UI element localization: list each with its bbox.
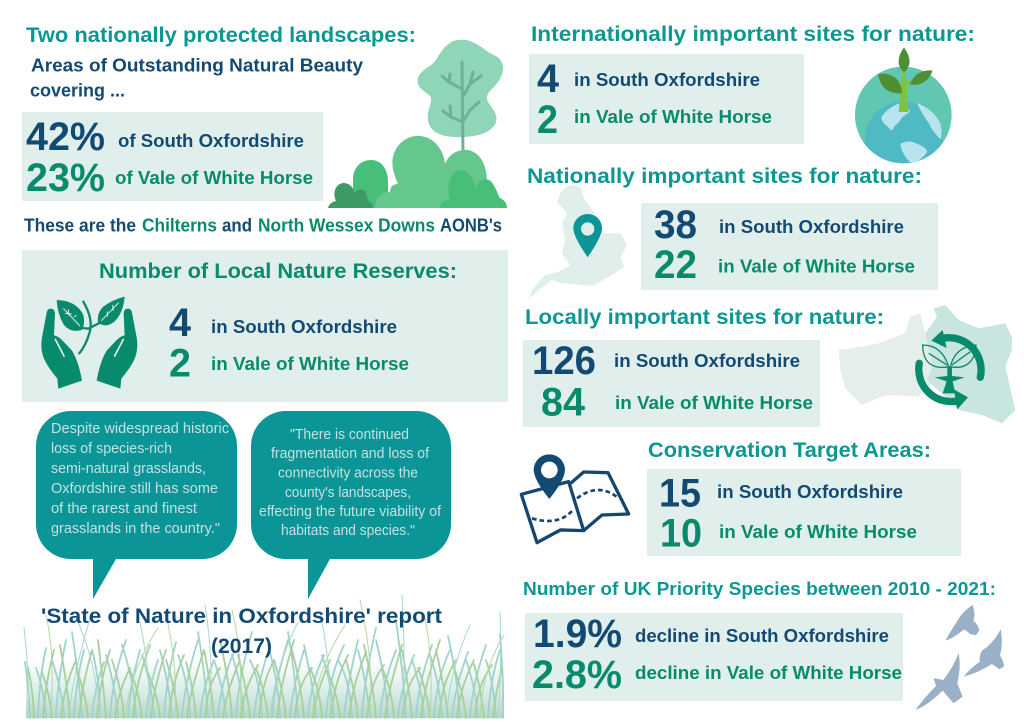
panel: AONB coverage — [22, 112, 323, 201]
icon: three birds — [915, 605, 1004, 710]
panel: priority species — [525, 612, 903, 701]
text: Chilterns and North Wessex Downs: and — [222, 214, 252, 236]
text: report source: 'State of Nature in Oxfordshire' report — [41, 604, 442, 628]
callout: grasslands quote: loss of species-rich — [51, 441, 172, 457]
stat: 10 Vale of White Horse: 10 — [660, 512, 702, 556]
heading: locally important sites: Locally important sites for nature: — [525, 306, 884, 329]
stat: 2.8 percent Vale of White Horse: 2.8% — [532, 653, 622, 697]
icon: district map with recycling leaf — [839, 305, 1015, 423]
heading: number of local nature reserves: Number of Local Nature Reserves: — [99, 260, 457, 283]
stat: 1.9 percent South Oxfordshire — [533, 612, 889, 656]
heading: number of UK priority species: Number of UK Priority Species between 2010 - 2021: — [523, 578, 996, 599]
stat: 4 reserves South Oxfordshire: in South Oxfordshire — [211, 316, 397, 337]
heading: nationally important sites: Nationally important sites for nature: — [527, 165, 922, 188]
icon: hands holding leaves — [41, 297, 137, 389]
stat: 15 South Oxfordshire — [659, 472, 903, 516]
stat: 2 Vale of White Horse: in Vale of White Horse — [574, 106, 772, 127]
stat: 42 percent South Oxfordshire — [26, 115, 304, 159]
stat: 84 Vale of White Horse: 84 — [541, 380, 586, 424]
text: areas of outstanding natural beauty: Areas of Outstanding Natural Beauty — [31, 54, 364, 76]
stat: 23 percent Vale of White Horse: of Vale of White Horse — [115, 167, 313, 188]
panel: national sites — [641, 203, 938, 290]
stat: 38 South Oxfordshire: 38 — [654, 203, 697, 247]
stat: 126 South Oxfordshire — [532, 339, 800, 383]
text: areas of outstanding natural beauty — [30, 54, 364, 100]
stat: 23 percent Vale of White Horse — [26, 156, 313, 200]
text: report source — [41, 604, 442, 658]
callout: grasslands quote — [36, 411, 237, 599]
stat: 4 South Oxfordshire: in South Oxfordshire — [574, 69, 760, 90]
callout: fragmentation quote — [251, 411, 451, 599]
illustration: tree and bushes — [328, 40, 507, 208]
stat: 4 South Oxfordshire — [537, 57, 760, 101]
text: areas of outstanding natural beauty: covering ... — [30, 80, 125, 100]
callout: fragmentation quote: county's landscapes, — [285, 485, 411, 501]
callout: grasslands quote: of the rarest and finest — [51, 501, 197, 517]
stat: 22 Vale of White Horse: in Vale of White Horse — [718, 256, 915, 276]
illustration: meadow grass — [24, 595, 504, 718]
stat: 2.8 percent Vale of White Horse: decline in Vale of White Horse — [635, 662, 902, 683]
callout: grasslands quote: Despite widespread historic — [51, 421, 229, 437]
text: report source: (2017) — [211, 634, 272, 658]
text: Chilterns and North Wessex Downs: AONB's — [440, 214, 502, 236]
stat: 10 Vale of White Horse — [660, 512, 917, 556]
heading: conservation target areas: Conservation Target Areas: — [648, 439, 931, 462]
stat: 126 South Oxfordshire: in South Oxfordshire — [614, 350, 800, 371]
text: Chilterns and North Wessex Downs: These are the — [24, 214, 136, 236]
stat: 1.9 percent South Oxfordshire: 1.9% — [533, 612, 622, 656]
stat: 4 South Oxfordshire: 4 — [537, 57, 560, 101]
stat: 2 Vale of White Horse: 2 — [537, 98, 558, 142]
panel: conservation target areas — [647, 469, 961, 556]
stat: 2 reserves Vale of White Horse — [169, 342, 409, 386]
stat: 22 Vale of White Horse — [654, 243, 915, 287]
stat: 15 South Oxfordshire: in South Oxfordshire — [717, 481, 903, 502]
callout: fragmentation quote: habitats and species." — [281, 523, 415, 539]
panel: international sites — [529, 54, 804, 144]
icon: globe with sprout — [855, 48, 952, 164]
stat: 1.9 percent South Oxfordshire: decline in South Oxfordshire — [635, 625, 889, 646]
heading: two nationally protected landscapes: Two nationally protected landscapes: — [26, 24, 416, 47]
heading: internationally important sites: Internationally important sites for nature: — [531, 23, 975, 46]
stat: 23 percent Vale of White Horse: 23% — [26, 156, 105, 200]
stat: 2 reserves Vale of White Horse: in Vale of White Horse — [211, 353, 409, 374]
callout: grasslands quote: Oxfordshire still has some — [51, 481, 218, 497]
stat: 126 South Oxfordshire: 126 — [532, 339, 596, 383]
callout: fragmentation quote: "There is continued — [290, 427, 409, 443]
stat: 2 reserves Vale of White Horse: 2 — [169, 342, 191, 386]
stat: 2.8 percent Vale of White Horse — [532, 653, 902, 697]
panel: local sites — [523, 339, 820, 427]
stat: 2 Vale of White Horse — [537, 98, 772, 142]
panel: local nature reserves — [22, 250, 508, 402]
callout: grasslands quote: grasslands in the country." — [51, 521, 220, 537]
text: Chilterns and North Wessex Downs — [24, 214, 502, 236]
stat: 4 reserves South Oxfordshire: 4 — [169, 301, 192, 345]
icon: folded map with pin — [521, 454, 629, 543]
stat: 84 Vale of White Horse: in Vale of White Horse — [615, 392, 813, 413]
icon: England map with pin — [529, 185, 627, 299]
callout: fragmentation quote: fragmentation and loss of — [271, 446, 430, 462]
callout: fragmentation quote: effecting the future viability of — [259, 504, 442, 520]
callout: grasslands quote: semi-natural grasslands, — [51, 461, 206, 477]
callout: fragmentation quote: connectivity across the — [278, 466, 418, 482]
stat: 10 Vale of White Horse: in Vale of White Horse — [719, 521, 917, 542]
stat: 42 percent South Oxfordshire: of South Oxfordshire — [118, 130, 304, 151]
stat: 15 South Oxfordshire: 15 — [659, 472, 701, 516]
text: Chilterns and North Wessex Downs: Chilterns — [142, 214, 217, 236]
stat: 38 South Oxfordshire — [654, 203, 904, 247]
stat: 4 reserves South Oxfordshire — [169, 301, 397, 345]
stat: 22 Vale of White Horse: 22 — [654, 243, 697, 287]
stat: 84 Vale of White Horse — [541, 380, 813, 424]
stat: 42 percent South Oxfordshire: 42% — [26, 115, 105, 159]
stat: 38 South Oxfordshire: in South Oxfordshire — [719, 216, 904, 237]
text: Chilterns and North Wessex Downs: North Wessex Downs — [258, 214, 435, 236]
